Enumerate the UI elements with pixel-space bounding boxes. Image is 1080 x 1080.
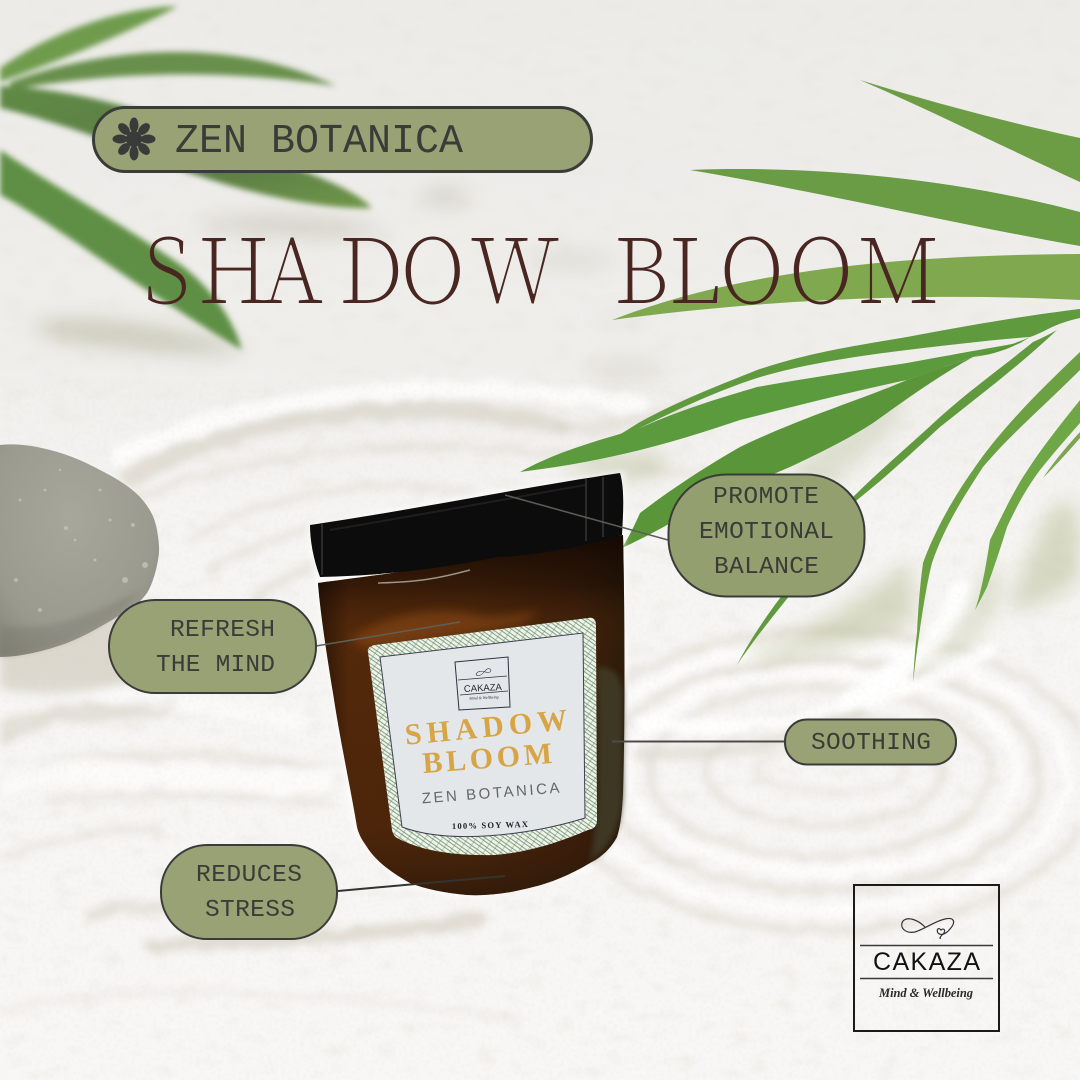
candle jar xyxy=(305,470,627,899)
label text: bloom: BLOOM xyxy=(421,737,553,780)
blurred palm leaves, top left xyxy=(0,6,372,350)
logo: cakaza mind and wellbeing: CAKAZA xyxy=(873,948,980,976)
jar body xyxy=(318,535,624,895)
heading pill: zen botanica xyxy=(94,108,592,172)
callout: refresh the mind xyxy=(109,600,316,693)
stone xyxy=(0,444,181,694)
logo: cakaza mind and wellbeing: Mind & Wellbeing xyxy=(878,986,973,1000)
pill text: ZEN BOTANICA xyxy=(175,119,463,165)
label mini logo: Mind & Wellbeing xyxy=(468,694,499,701)
icon: infinity heart xyxy=(902,918,954,938)
label mini logo xyxy=(455,657,510,710)
callout: promote emotional balance: PROMOTE xyxy=(713,484,819,511)
callout: promote emotional balance: BALANCE xyxy=(714,554,819,581)
sharp palm leaves, right xyxy=(520,80,1080,683)
callout: promote emotional balance: EMOTIONAL xyxy=(699,519,834,546)
label mini logo: CAKAZA xyxy=(464,682,503,695)
label text: shadow: SHADOW xyxy=(403,703,569,752)
callout: promote emotional balance xyxy=(668,474,864,596)
callout: reduces stress xyxy=(161,845,337,939)
logo: cakaza mind and wellbeing xyxy=(854,885,999,1031)
callout: refresh the mind: REFRESH xyxy=(170,617,275,644)
label text: zen botanica: ZEN BOTANICA xyxy=(421,780,560,807)
callout: reduces stress: REDUCES xyxy=(196,862,302,889)
callout: refresh the mind: THE MIND xyxy=(156,652,275,679)
callout: soothing xyxy=(785,720,956,764)
label text: soy wax: 100% SOY WAX xyxy=(452,819,529,831)
icon: flower xyxy=(112,118,156,160)
callout: reduces stress: STRESS xyxy=(205,897,295,924)
callout connector lines xyxy=(316,495,785,891)
callout: soothing: SOOTHING xyxy=(811,730,931,757)
title: SHADOW BLOOM xyxy=(143,200,940,330)
lid xyxy=(310,473,623,577)
label xyxy=(368,618,597,855)
